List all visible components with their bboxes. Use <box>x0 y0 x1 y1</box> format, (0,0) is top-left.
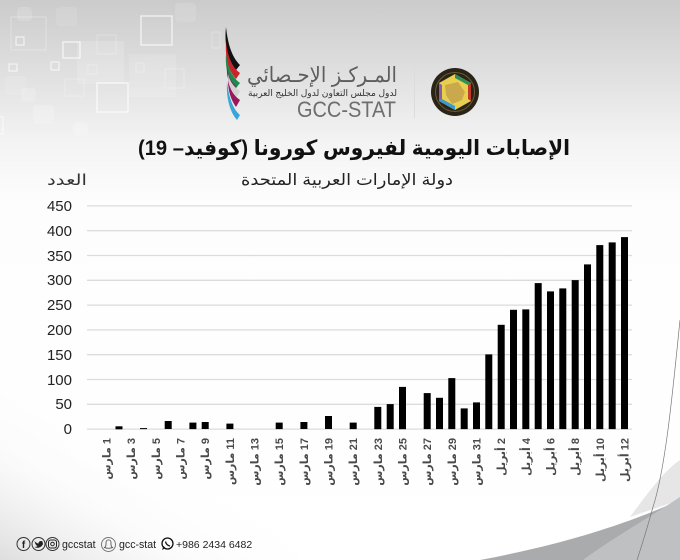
x axis labels: 27 مارس <box>422 438 434 486</box>
divider <box>414 68 415 118</box>
icon: snapchat <box>102 538 116 552</box>
y axis labels: 250 <box>47 297 72 314</box>
x axis labels: 5 مارس <box>151 438 163 480</box>
x axis labels: 2 أبريل <box>494 438 508 476</box>
snapchat text: gcc-stat <box>119 539 156 551</box>
y axis title: العدد <box>47 172 87 189</box>
x axis labels: 11 مارس <box>225 438 237 485</box>
phone number: +986 2434 6482 <box>176 539 252 551</box>
bars <box>116 237 628 429</box>
logo arabic subtitle: لدول مجلس التعاون لدول الخليج العربية <box>248 88 397 98</box>
y axis labels: 100 <box>47 372 72 389</box>
footer: social contacts <box>17 538 252 552</box>
icon: whatsapp <box>162 538 173 550</box>
y axis labels: 300 <box>47 272 72 289</box>
icon: instagram <box>46 538 59 550</box>
icon: GCC emblem <box>431 68 479 116</box>
y axis labels: 150 <box>47 347 72 364</box>
y axis labels: 400 <box>47 223 72 240</box>
y axis labels: 50 <box>55 396 72 413</box>
x axis labels: 1 مارس <box>102 438 114 480</box>
x axis labels <box>102 437 632 486</box>
title: الإصابات اليومية لفيروس كورونا (كوفيد– 19) <box>138 137 570 160</box>
x axis labels: 19 مارس <box>324 438 336 486</box>
logo arabic name: المـركـز الإحـصائي <box>247 64 397 87</box>
x axis labels: 12 أبريل <box>618 438 632 482</box>
x axis labels: 21 مارس <box>348 438 360 486</box>
x axis labels: 31 مارس <box>472 438 484 486</box>
y axis labels: 450 <box>47 198 72 215</box>
subtitle: دولة الإمارات العربية المتحدة <box>241 172 453 190</box>
bar chart <box>47 198 632 486</box>
decorative swoosh bottom right <box>480 320 680 560</box>
handle text: gccstat <box>62 539 96 551</box>
y axis labels: 200 <box>47 322 72 339</box>
x axis labels: 6 أبريل <box>544 438 558 476</box>
y axis labels: 0 <box>64 421 72 438</box>
x axis labels: 13 مارس <box>250 438 262 486</box>
x axis labels: 25 مارس <box>398 438 410 486</box>
x axis labels: 15 مارس <box>274 438 286 486</box>
icon: facebook: f <box>22 540 26 551</box>
icon: coloured ribbons <box>225 27 240 120</box>
x axis labels: 29 مارس <box>447 438 459 486</box>
x axis labels: 23 مارس <box>373 438 385 486</box>
x axis labels: 3 مارس <box>126 438 138 480</box>
y axis labels <box>47 198 72 438</box>
x axis labels: 9 مارس <box>200 438 212 480</box>
x axis labels: 7 مارس <box>176 438 188 480</box>
x axis labels: 8 أبريل <box>568 438 582 476</box>
icon: facebook <box>17 538 30 551</box>
icon: twitter <box>32 538 45 550</box>
x axis labels: 10 أبريل <box>593 438 607 482</box>
y axis labels: 350 <box>47 248 72 265</box>
logo latin name: GCC-STAT <box>297 97 396 122</box>
x axis labels: 4 أبريل <box>519 437 533 476</box>
logo: GCC-STAT <box>225 27 397 122</box>
x axis labels: 17 مارس <box>299 438 311 486</box>
